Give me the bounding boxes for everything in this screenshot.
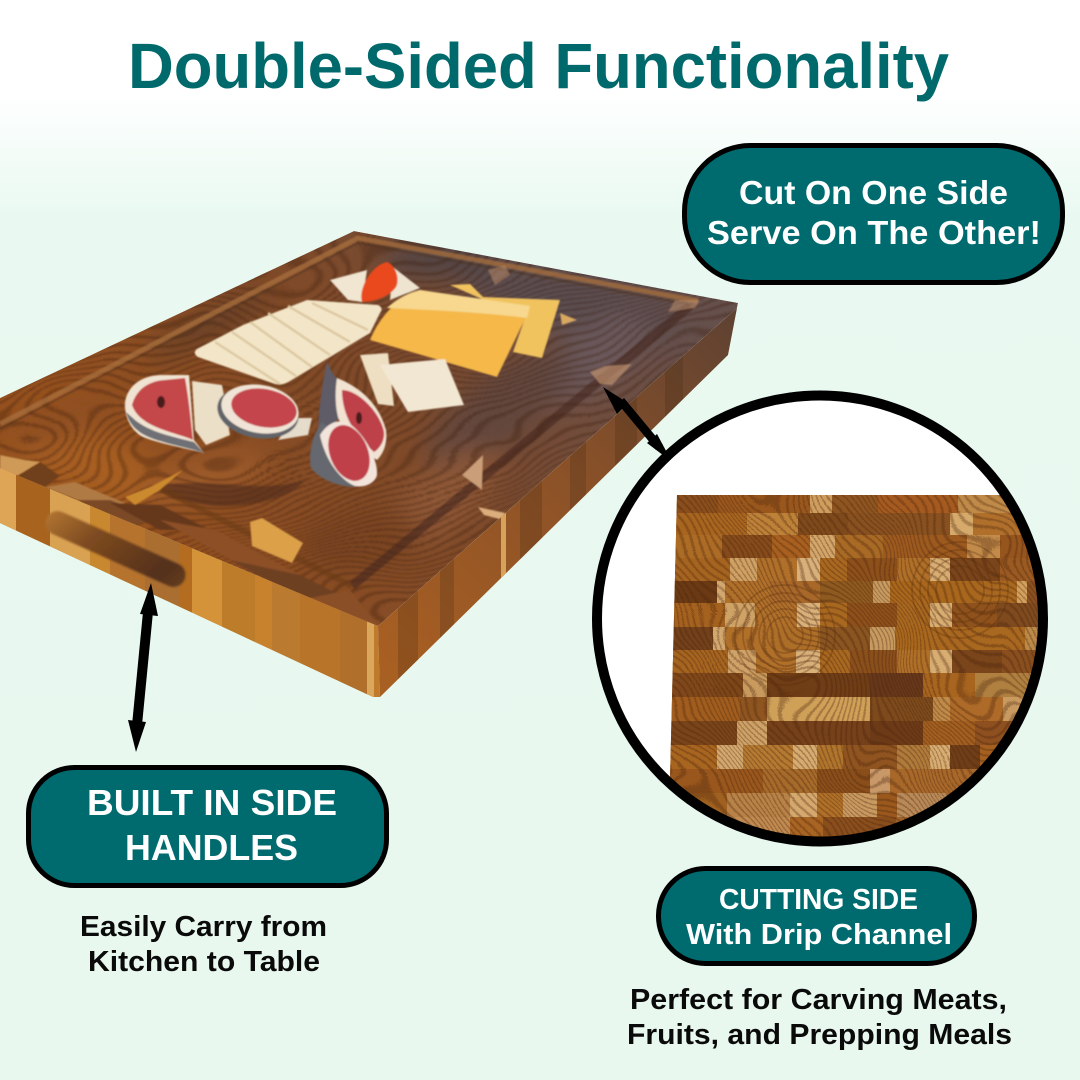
pill: cut on one side bbox=[684, 146, 1062, 282]
caption: handles: Easily Carry from bbox=[80, 911, 327, 943]
circular close-up of cutting side bbox=[597, 396, 1080, 890]
pill: cutting side bbox=[658, 868, 974, 964]
caption: cutting side bbox=[627, 984, 1012, 1051]
end-grain brick rows bbox=[670, 495, 1038, 836]
pill: cutting side: CUTTING SIDE bbox=[719, 884, 918, 916]
board right side bbox=[370, 300, 740, 700]
crackers near cheese bbox=[360, 353, 464, 412]
pill: built in side handles: BUILT IN SIDE bbox=[87, 782, 337, 823]
board top surface bbox=[0, 231, 738, 626]
end-grain wood close-up bbox=[670, 495, 1038, 836]
pill: cut on one side: Serve On The Other! bbox=[707, 214, 1041, 251]
pill: cutting side: With Drip Channel bbox=[686, 919, 952, 951]
fig, upper slice bbox=[318, 362, 386, 460]
caption: handles bbox=[80, 911, 327, 978]
cracker and tomato bbox=[330, 262, 420, 302]
pill: built in side handles: HANDLES bbox=[125, 827, 298, 868]
light end-grain blocks bbox=[0, 265, 700, 563]
caption: handles: Kitchen to Table bbox=[88, 946, 320, 978]
crackers stack bbox=[195, 300, 382, 385]
wood grain bbox=[0, 234, 737, 623]
circle fill bbox=[597, 396, 1043, 842]
concentric growth rings bbox=[735, 542, 1008, 685]
caption: cutting side: Perfect for Carving Meats, bbox=[630, 984, 1007, 1016]
cheese wedges bbox=[370, 284, 577, 377]
food on the board bbox=[125, 262, 577, 487]
board front side with handle bbox=[0, 460, 385, 700]
fig half, centre bbox=[213, 379, 303, 445]
fig half, left bbox=[125, 375, 204, 453]
cheese slice beside fig bbox=[192, 381, 230, 445]
cutting board photo bbox=[0, 231, 738, 697]
drip groove bbox=[0, 238, 698, 586]
pill: built in side handles bbox=[28, 768, 386, 886]
handle recess bbox=[46, 510, 187, 588]
pill: cut on one side: Cut On One Side bbox=[739, 174, 1008, 211]
wood grain overlay bbox=[670, 495, 1038, 836]
caption: cutting side: Fruits, and Prepping Meals bbox=[627, 1019, 1012, 1051]
front rim blocks bbox=[17, 462, 378, 626]
title: Double-Sided Functionality bbox=[128, 30, 949, 102]
circle outline bbox=[597, 396, 1043, 842]
arrow to handle bbox=[128, 583, 158, 752]
dark streak bbox=[157, 480, 305, 506]
fig, lower slice bbox=[310, 419, 377, 487]
colour patches bbox=[0, 240, 685, 580]
arrow to drip channel bbox=[603, 387, 672, 462]
